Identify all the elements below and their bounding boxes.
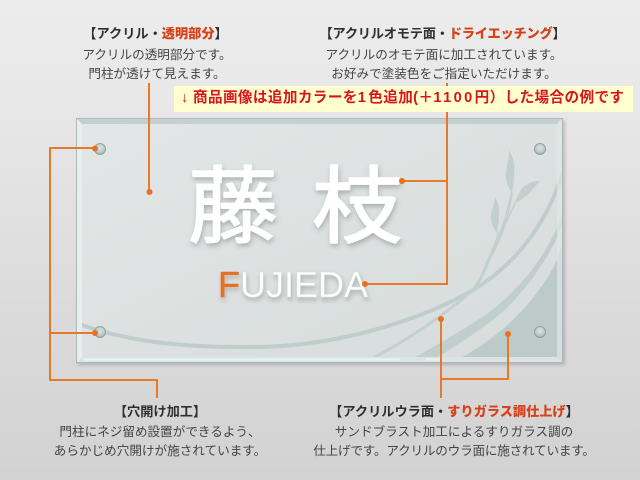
callout: back frosted finish	[313, 404, 595, 458]
plate	[76, 118, 563, 363]
bevel edges	[76, 118, 563, 363]
callout: transparent part: 【アクリル・透明部分】	[83, 26, 228, 41]
callout: transparent part: アクリルの透明部分です。	[82, 48, 232, 62]
callout: drilled holes	[54, 404, 266, 458]
thin curve B	[365, 240, 497, 362]
callout: back frosted finish: 仕上げです。アクリルのウラ面に施されています。	[313, 444, 595, 458]
frosted back surface	[462, 246, 562, 357]
callout lines	[50, 83, 508, 398]
thin curve A	[76, 172, 563, 347]
callout: front dry etching: お好みで塗装色をご指定いただけます。	[331, 66, 557, 80]
notice banner	[174, 86, 633, 112]
callout: drilled holes: あらかじめ穴開けが施されています。	[54, 444, 266, 458]
romanized name: FUJIEDA	[218, 264, 368, 305]
callout: transparent part	[82, 26, 232, 80]
callout: front dry etching	[320, 26, 566, 80]
frosted swoosh band	[415, 228, 557, 357]
acrylic nameplate with callout lines	[49, 83, 566, 398]
notice banner: ↓	[181, 90, 189, 106]
callout: front dry etching: 【アクリルオモテ面・ドライエッチング】	[320, 26, 566, 41]
leaf decoration	[485, 150, 540, 264]
callout: drilled holes: 門柱にネジ留め設置ができるよう、	[59, 425, 261, 439]
callout: back frosted finish: 【アクリルウラ面・すりガラス調仕上げ】	[329, 404, 579, 419]
callout: drilled holes: 【穴開け加工】	[114, 404, 206, 419]
callout: front dry etching: アクリルのオモテ面に加工されています。	[325, 48, 562, 62]
callout dots	[92, 146, 511, 337]
name in kanji: 藤	[188, 139, 278, 261]
second kanji: 枝	[312, 139, 402, 261]
notice banner: 商品画像は追加カラーを1色追加(＋1100円）した場合の例です	[193, 90, 624, 106]
callout: transparent part: 門柱が透けて見えます。	[88, 66, 226, 80]
callout: back frosted finish: サンドブラスト加工によるすりガラス調の	[335, 425, 573, 439]
mounting holes	[94, 144, 546, 338]
